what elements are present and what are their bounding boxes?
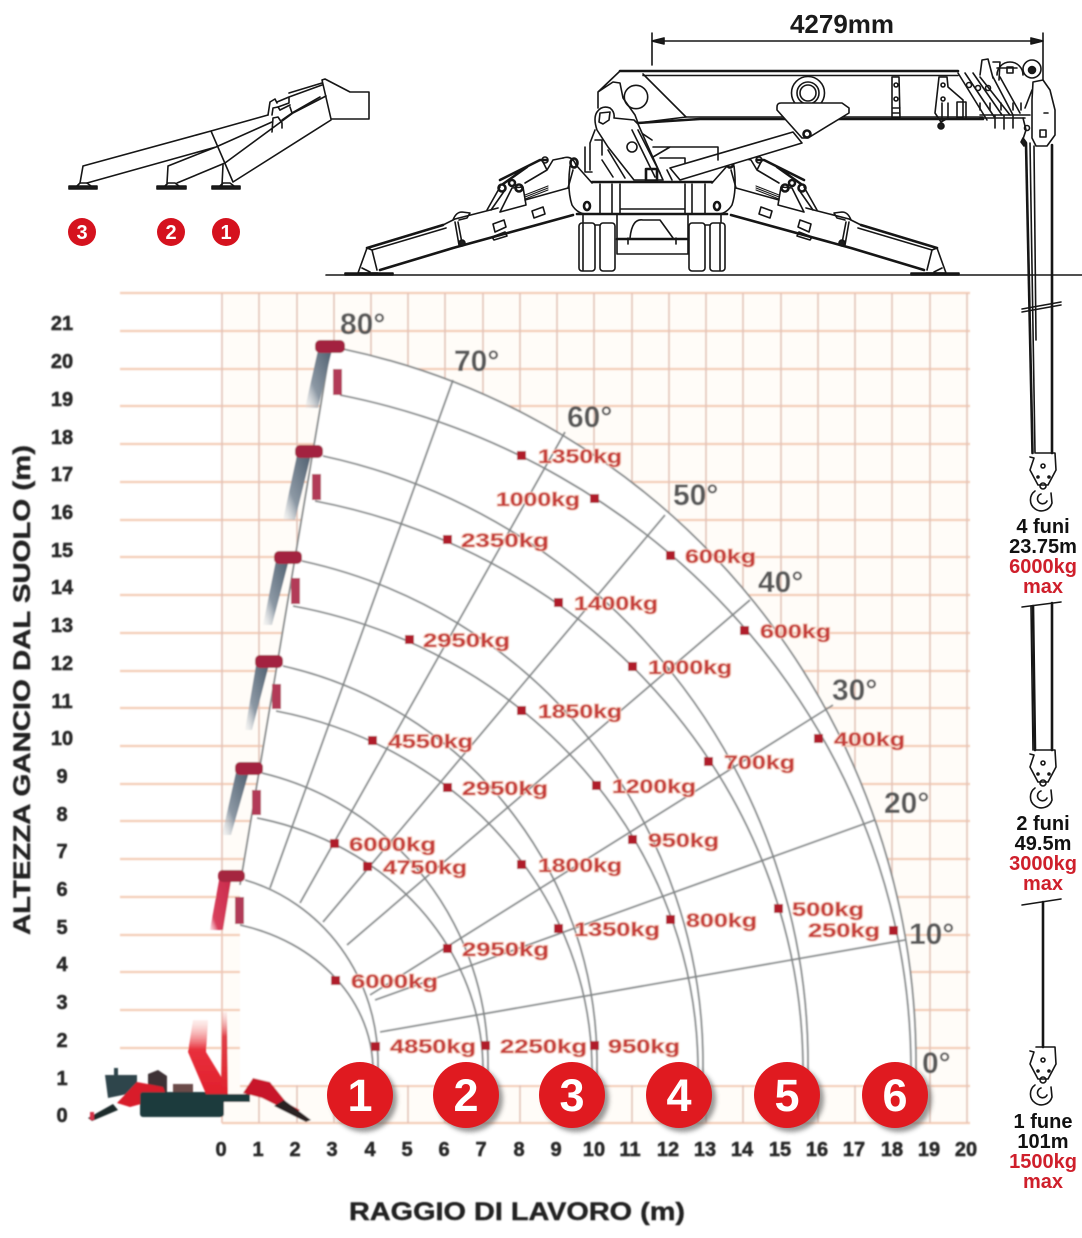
y axis numbers: 11 [51, 691, 73, 713]
small crane at ground level [88, 1012, 311, 1122]
y axis numbers: 5 [56, 917, 68, 939]
caption: 4 ropes [1009, 516, 1077, 598]
position markers 3, 2, 1: 2 [165, 222, 177, 244]
hook block: 1 rope [1030, 1047, 1056, 1105]
load values: 1000kg [648, 658, 732, 679]
load values: 1850kg [538, 702, 622, 723]
load values: 700kg [724, 753, 795, 774]
caption: 1 rope: 1 fune [1014, 1111, 1072, 1133]
y axis numbers: 21 [51, 313, 73, 335]
load values: 950kg [608, 1037, 680, 1058]
load values: 6000kg [349, 835, 436, 856]
angle labels: 40° [758, 566, 803, 599]
x axis numbers: 10 [583, 1139, 605, 1161]
hook block: 2 ropes [1030, 750, 1056, 808]
load values: 800kg [686, 911, 757, 932]
y axis numbers: 0 [56, 1105, 68, 1127]
x axis numbers: 19 [918, 1139, 940, 1161]
caption: 1 rope: max [1023, 1171, 1063, 1193]
y axis numbers: 13 [51, 615, 73, 637]
boom positions with hook blocks [210, 340, 345, 930]
load values: 950kg [648, 831, 719, 852]
jib lines middle section [1022, 602, 1061, 750]
numbered red badges for boom lengths: 1 [347, 1070, 373, 1121]
position markers 3, 2, 1: 1 [220, 222, 232, 244]
outrigger legs [345, 157, 959, 275]
x axis title: RAGGIO DI LAVORO (m) [349, 1198, 685, 1226]
x axis numbers: 7 [475, 1139, 487, 1161]
outrigger position diagram [69, 79, 369, 189]
load values: 2950kg [462, 940, 549, 961]
x axis numbers: 3 [326, 1139, 338, 1161]
jib lines upper section [1022, 143, 1061, 453]
y axis numbers: 6 [56, 879, 68, 901]
load values: 400kg [834, 730, 905, 751]
load values: 1400kg [574, 594, 658, 615]
y axis numbers: 12 [51, 653, 73, 675]
caption: 4 ropes: max [1023, 576, 1063, 598]
position markers 3, 2, 1 [68, 218, 240, 246]
y axis numbers: 16 [51, 502, 73, 524]
y axis numbers: 14 [51, 577, 74, 599]
caption: 2 ropes: 2 funi [1016, 813, 1070, 835]
angle labels: 60° [567, 401, 612, 434]
y axis numbers: 7 [56, 841, 68, 863]
caption: 2 ropes: 3000kg [1009, 853, 1077, 875]
y axis numbers: 3 [56, 992, 68, 1014]
numbered red badges for boom lengths: 2 [453, 1070, 479, 1121]
numbered red badges for boom lengths [327, 1062, 932, 1132]
load values: 2250kg [500, 1037, 587, 1058]
load values: 1350kg [538, 447, 622, 468]
angle labels: 80° [340, 308, 385, 341]
load values: 600kg [685, 547, 756, 568]
load values: 2950kg [462, 779, 548, 800]
load values: 4550kg [388, 732, 473, 753]
chart background and grid [120, 293, 970, 1123]
y axis numbers: 4 [56, 954, 68, 976]
load values: 4850kg [390, 1037, 476, 1058]
x axis numbers: 15 [769, 1139, 791, 1161]
load values: 4750kg [383, 858, 467, 879]
load arcs for the six boom lengths [240, 349, 916, 1085]
x axis numbers: 2 [289, 1139, 301, 1161]
wheels and axle [579, 215, 725, 271]
caption: 4 ropes: 23.75m [1009, 536, 1077, 558]
numbered red badges for boom lengths: 6 [882, 1070, 908, 1121]
crane side view drawing [326, 33, 1082, 275]
x axis numbers: 13 [694, 1139, 716, 1161]
y axis numbers: 2 [56, 1030, 68, 1052]
y axis numbers: 15 [51, 540, 73, 562]
boom [598, 71, 983, 129]
x axis numbers: 20 [955, 1139, 977, 1161]
angle labels: 20° [884, 787, 929, 820]
angle labels [340, 308, 954, 1080]
load values: 600kg [760, 622, 831, 643]
y axis numbers: 19 [51, 389, 73, 411]
dimension label: 4279mm [790, 9, 894, 39]
caption: 1 rope: 101m [1017, 1131, 1069, 1153]
angle labels: 70° [454, 345, 499, 378]
load values: 1350kg [574, 920, 660, 941]
numbered red badges for boom lengths: 3 [559, 1070, 585, 1121]
dimension line [652, 33, 1043, 82]
numbered red badges for boom lengths: 5 [774, 1070, 800, 1121]
x axis numbers: 1 [252, 1139, 264, 1161]
x axis numbers: 0 [215, 1139, 227, 1161]
base [577, 182, 727, 222]
load values: 2950kg [423, 631, 510, 652]
caption: 4 ropes: 4 funi [1016, 516, 1070, 538]
load values: 2350kg [461, 531, 549, 552]
angle labels: 0° [922, 1047, 951, 1080]
boom head with sheaves [958, 59, 1055, 146]
x axis numbers [215, 1139, 977, 1161]
x axis numbers: 11 [619, 1139, 641, 1161]
y axis numbers: 9 [56, 766, 68, 788]
y axis numbers: 20 [51, 351, 73, 373]
x axis numbers: 14 [731, 1139, 754, 1161]
x axis numbers: 17 [843, 1139, 865, 1161]
y axis numbers: 10 [51, 728, 73, 750]
angle labels: 10° [909, 918, 954, 951]
chart: load diagram [9, 293, 977, 1226]
y axis numbers: 8 [56, 804, 68, 826]
y axis numbers [51, 313, 74, 1127]
load values: 1200kg [612, 777, 696, 798]
caption: 1 rope: 1500kg [1009, 1151, 1077, 1173]
ground line [326, 274, 1082, 276]
caption: 4 ropes: 6000kg [1009, 556, 1077, 578]
x axis numbers: 6 [438, 1139, 450, 1161]
load values: 250kg [808, 921, 880, 942]
boom pivot and cylinder [670, 76, 849, 180]
x axis numbers: 5 [401, 1139, 413, 1161]
angle labels: 50° [673, 479, 718, 512]
x axis numbers: 4 [364, 1139, 376, 1161]
load values [330, 447, 905, 1058]
load values: 6000kg [351, 972, 438, 993]
y axis numbers: 1 [56, 1068, 68, 1090]
caption: 2 ropes: max [1023, 873, 1063, 895]
position markers 3, 2, 1: 3 [76, 222, 88, 244]
caption: 2 ropes [1009, 813, 1077, 895]
x axis numbers: 18 [881, 1139, 903, 1161]
caption: 2 ropes: 49.5m [1015, 833, 1071, 855]
jib lines lower section [1022, 899, 1061, 1047]
load values: 1000kg [496, 490, 580, 511]
x axis numbers: 9 [550, 1139, 562, 1161]
x axis numbers: 12 [657, 1139, 679, 1161]
caption: 1 rope [1009, 1111, 1077, 1193]
load values: 500kg [792, 900, 864, 921]
y axis numbers: 18 [51, 427, 73, 449]
numbered red badges for boom lengths: 4 [666, 1070, 692, 1121]
y axis title: ALTEZZA GANCIO DAL SUOLO (m) [9, 445, 36, 935]
angle labels: 30° [832, 674, 877, 707]
x axis numbers: 8 [513, 1139, 525, 1161]
hook block: 4 ropes [1030, 453, 1056, 511]
load values: 1800kg [538, 856, 622, 877]
x axis numbers: 16 [806, 1139, 828, 1161]
y axis numbers: 17 [51, 464, 73, 486]
slewing post [585, 107, 718, 181]
